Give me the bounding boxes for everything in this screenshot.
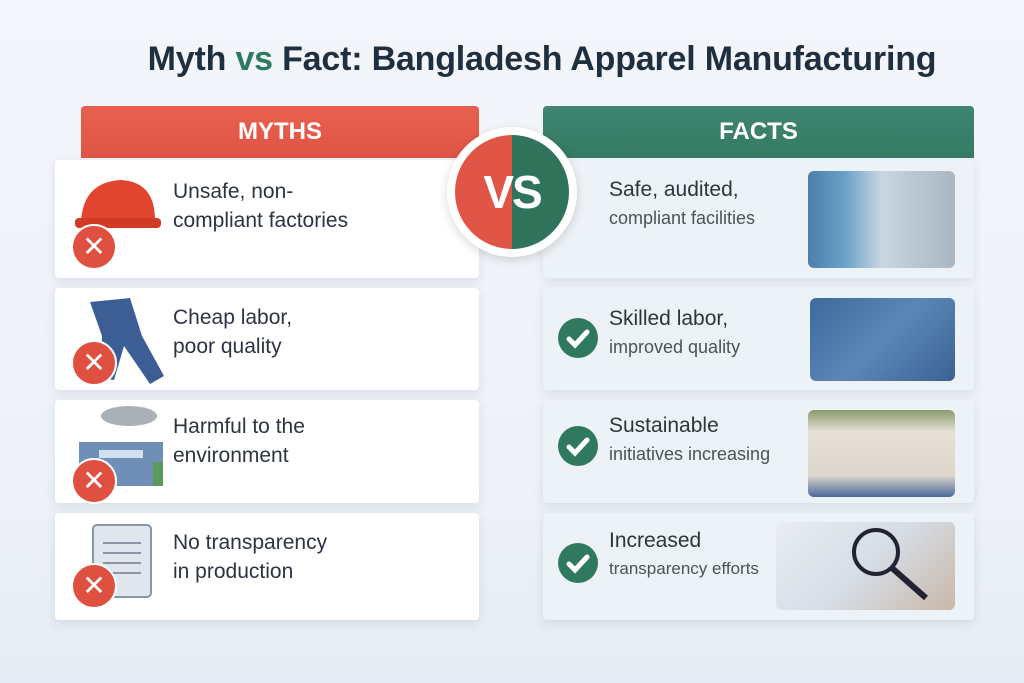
header: facts — [543, 106, 974, 158]
icon: x — [71, 458, 117, 504]
text — [609, 307, 740, 357]
text: Increased — [609, 529, 701, 552]
icon: hard hat — [75, 180, 161, 228]
header: myths — [81, 106, 479, 158]
header: facts: FACTS — [719, 118, 798, 145]
icon: check — [558, 543, 598, 583]
fact card 4 — [543, 513, 974, 620]
text: environment — [173, 444, 289, 467]
text: initiatives increasing — [609, 444, 770, 464]
fact card 1 — [543, 160, 974, 278]
text — [173, 180, 348, 232]
text: compliant factories — [173, 209, 348, 232]
photo: fabric rolls — [808, 410, 955, 497]
vs badge — [447, 127, 577, 257]
text: Harmful to the — [173, 415, 305, 438]
icon: x — [71, 563, 117, 609]
photo: denim — [810, 298, 955, 381]
text: Skilled labor, — [609, 307, 728, 330]
myth card 3 — [55, 400, 479, 503]
icon: x: ✕ — [82, 231, 106, 262]
fact card 2 — [543, 287, 974, 390]
icon: x — [71, 340, 117, 386]
text: poor quality — [173, 335, 282, 358]
vs badge: VS — [483, 166, 541, 218]
myth card 4 — [55, 513, 479, 620]
text: compliant facilities — [609, 208, 755, 228]
text: improved quality — [609, 337, 740, 357]
icon: check — [558, 426, 598, 466]
text: transparency efforts — [609, 559, 759, 578]
text — [173, 531, 327, 583]
photo: magnifier on reports — [776, 522, 955, 610]
icon: x — [71, 224, 117, 270]
fact card 3 — [543, 400, 974, 503]
text — [609, 414, 770, 464]
icon: check — [558, 318, 598, 358]
text: Safe, audited, — [609, 178, 739, 201]
text — [173, 415, 305, 467]
icon: x: ✕ — [82, 347, 106, 378]
text: in production — [173, 560, 293, 583]
icon: x: ✕ — [82, 465, 106, 496]
header: myths: MYTHS — [238, 118, 322, 145]
icon: jeans — [90, 298, 164, 384]
text: No transparency — [173, 531, 327, 554]
title: Myth vs Fact: Bangladesh Apparel Manufacturing — [148, 40, 936, 78]
myth card 1 — [55, 160, 479, 278]
text: Unsafe, non- — [173, 180, 293, 203]
photo: factory worker — [808, 171, 955, 268]
icon: x: ✕ — [82, 570, 106, 601]
text — [609, 178, 755, 228]
text: Sustainable — [609, 414, 719, 437]
text — [173, 306, 292, 358]
text — [609, 529, 759, 578]
myth card 2 — [55, 288, 479, 390]
icon: factory — [79, 406, 163, 486]
icon: document — [92, 524, 152, 598]
text: Cheap labor, — [173, 306, 292, 329]
